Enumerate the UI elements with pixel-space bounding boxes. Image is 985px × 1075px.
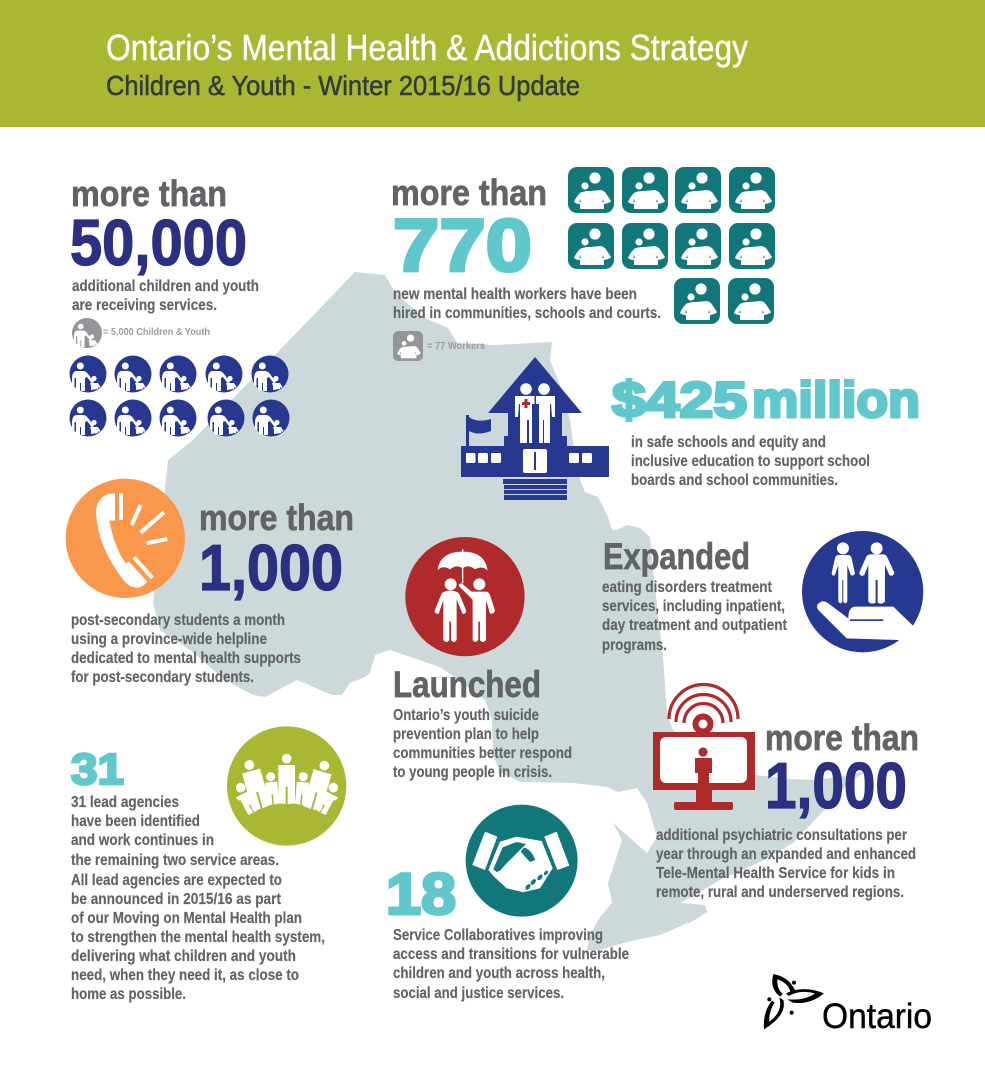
icon: umbrella [405, 537, 525, 656]
description: communities better respond [393, 745, 572, 762]
heading: more than [71, 173, 227, 214]
number: 31 [71, 745, 124, 794]
description: to young people in crisis. [393, 764, 552, 781]
description: remote, rural and underserved regions. [656, 884, 904, 901]
icons: children and youth [70, 356, 290, 436]
description: additional children and youth [72, 278, 259, 295]
description: have been identified [71, 813, 200, 830]
description: 31 lead agencies [71, 794, 179, 811]
description [71, 794, 325, 1003]
description: hired in communities, schools and courts. [393, 305, 661, 322]
icon: phone [66, 479, 185, 598]
description [71, 612, 301, 686]
icon: hand with people [802, 531, 927, 652]
description: post-secondary students a month [71, 612, 285, 629]
description: programs. [602, 637, 667, 654]
description: need, when they need it, as close to [71, 967, 299, 984]
description: prevention plan to help [393, 726, 539, 743]
heading: Expanded [603, 536, 750, 577]
description [602, 579, 787, 654]
description: for post-secondary students. [71, 669, 254, 686]
description: Ontario’s youth suicide [393, 707, 539, 724]
logo: Ontario: Ontario [822, 997, 932, 1036]
description: delivering what children and youth [71, 948, 296, 965]
description: eating disorders treatment [602, 579, 772, 596]
amount: million [752, 372, 920, 428]
description: and work continues in [71, 832, 214, 849]
description: year through an expanded and enhanced [656, 846, 916, 863]
logo: Ontario [764, 974, 932, 1036]
number: 50,000 [70, 206, 247, 279]
heading: more than [199, 497, 354, 538]
description [393, 286, 661, 322]
panel: $425 million [612, 372, 920, 489]
description [393, 927, 629, 1002]
description: services, including inpatient, [602, 598, 785, 615]
description: using a province-wide helpline [71, 631, 267, 648]
description: boards and school communities. [631, 472, 838, 489]
icon: school [461, 357, 609, 500]
description [656, 827, 916, 901]
number: 1,000 [199, 531, 343, 604]
icons: workers [568, 167, 775, 324]
description [393, 707, 572, 781]
icon: tele-mental monitor [653, 684, 755, 810]
description: in safe schools and equity and [631, 434, 826, 451]
description: children and youth across health, [393, 965, 605, 982]
description: Tele-Mental Health Service for kids in [656, 865, 895, 882]
description: additional psychiatric consultations per [656, 827, 907, 844]
panel: expanded [602, 536, 787, 654]
heading: more than [765, 717, 919, 758]
panel: 31 lead agencies [71, 745, 325, 1003]
icon: group of people [227, 726, 346, 846]
description [631, 434, 870, 489]
header band [0, 0, 985, 127]
number: 770 [393, 204, 532, 287]
panel: psychiatric consultations [656, 717, 919, 901]
description: All lead agencies are expected to [71, 872, 282, 889]
description: to strengthen the mental health system, [71, 929, 325, 946]
description: day treatment and outpatient [602, 617, 787, 634]
description: Service Collaboratives improving [393, 927, 603, 944]
legend [72, 318, 210, 348]
description: new mental health workers have been [393, 286, 637, 303]
title [106, 27, 748, 101]
panel: 50,000 children [70, 173, 290, 436]
amount [612, 372, 920, 428]
panel: 770 workers [391, 167, 775, 361]
map of Ontario [153, 272, 868, 950]
legend: = 5,000 Children & Youth [103, 326, 210, 338]
description: dedicated to mental health supports [71, 650, 301, 667]
number: 1,000 [765, 749, 907, 822]
icon: handshake [466, 805, 578, 917]
legend: = 77 Workers [427, 340, 485, 352]
description: of our Moving on Mental Health plan [71, 910, 302, 927]
description: be announced in 2015/16 as part [71, 891, 281, 908]
description: the remaining two service areas. [71, 852, 279, 869]
description: are receiving services. [72, 297, 217, 314]
panel: helpline students [71, 497, 354, 686]
description: access and transitions for vulnerable [393, 946, 629, 963]
title: Ontario’s Mental Health & Addictions Strategy [106, 27, 748, 68]
description [72, 278, 259, 314]
panel: launched [393, 664, 572, 781]
description: inclusive education to support school [631, 453, 870, 470]
title: Children & Youth - Winter 2015/16 Update [106, 70, 580, 101]
amount: $425 [612, 372, 747, 428]
heading: Launched [393, 664, 541, 705]
heading: more than [391, 172, 547, 213]
number: 18 [386, 862, 456, 927]
description: home as possible. [71, 986, 186, 1003]
panel: 18 service collaboratives [386, 862, 629, 1002]
description: social and justice services. [393, 985, 564, 1002]
legend [393, 331, 485, 361]
